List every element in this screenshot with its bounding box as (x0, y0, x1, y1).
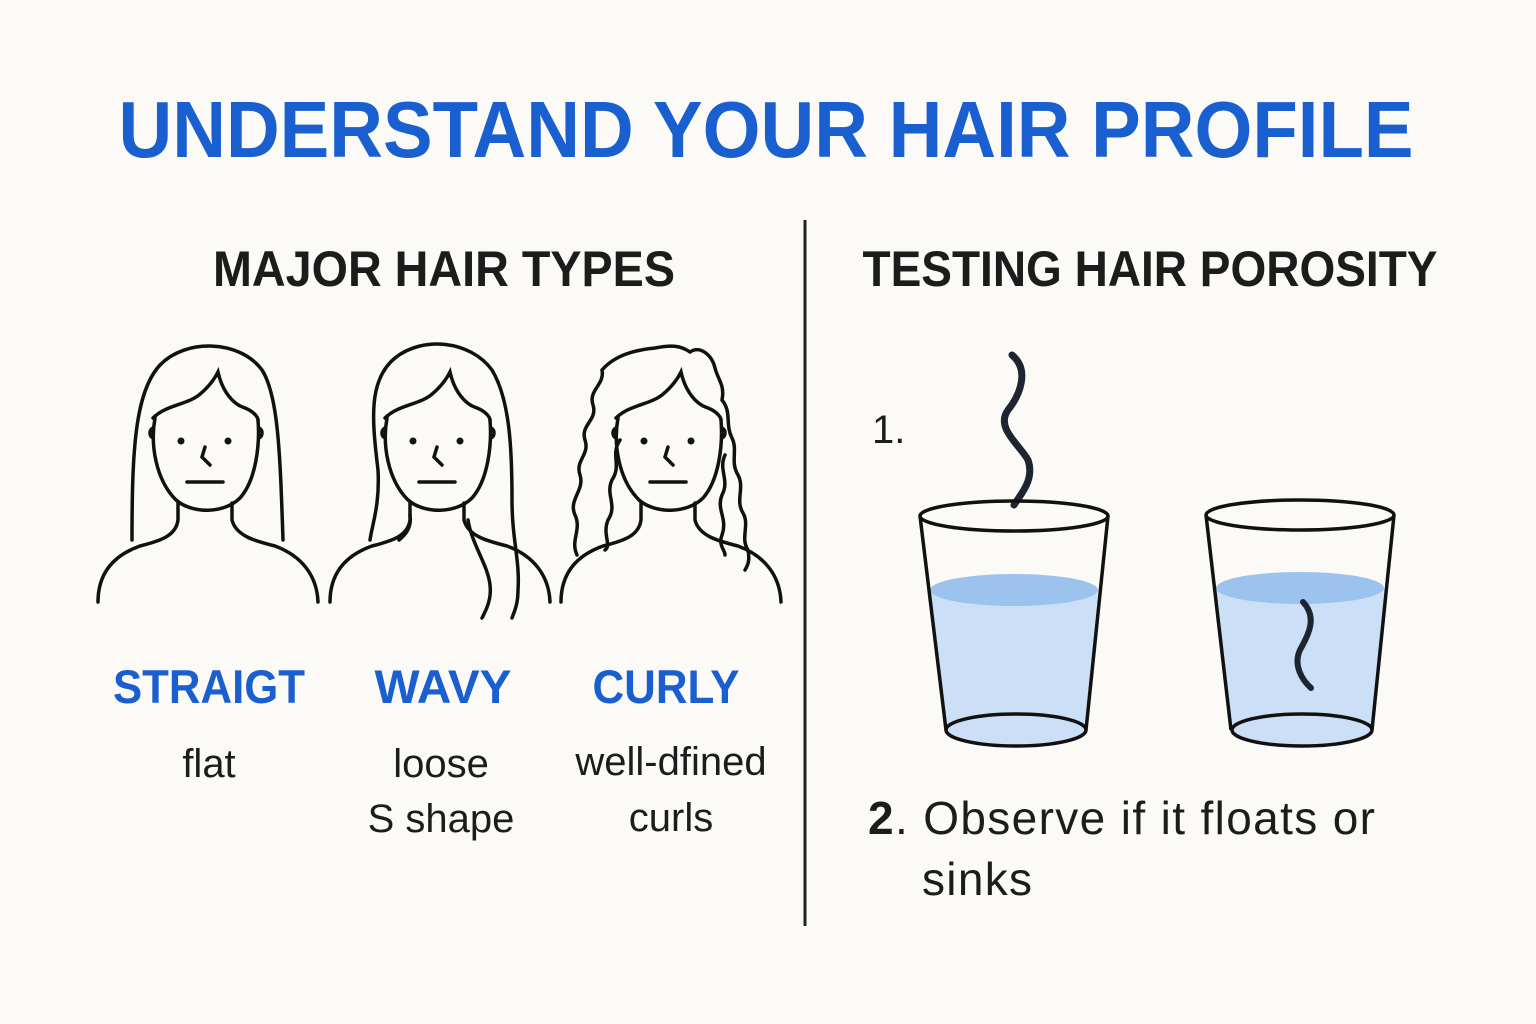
text: well-defined curls: curls (629, 796, 713, 840)
heading: testing hair porosity: TESTING HAIR POROSITY (862, 241, 1438, 297)
text: flat: flat (182, 742, 236, 786)
text: step 2 (868, 792, 1375, 905)
step 1 number: 1. (872, 408, 905, 452)
text: step 2: sinks (922, 853, 1032, 905)
icon: glass floating (920, 501, 1108, 746)
icon: curly hair face (561, 346, 781, 602)
text: loose S shape: S shape (368, 797, 514, 841)
icon: glass sinking (1206, 500, 1394, 746)
text: well-defined curls (574, 740, 767, 840)
text: loose S shape: loose (393, 742, 489, 786)
text: loose S shape (368, 742, 514, 841)
icon: wavy hair face (330, 344, 550, 618)
icon: hair strand above glass (1004, 355, 1030, 505)
icon: straight hair face (98, 346, 318, 602)
text: step 2: 2. Observe if it floats or (868, 792, 1375, 844)
label: wavy: WAVY (374, 660, 512, 713)
title: UNDERSTAND YOUR HAIR PROFILE (118, 85, 1414, 174)
text: well-defined curls: well-dfined (574, 740, 767, 784)
heading: major hair types: MAJOR HAIR TYPES (213, 241, 675, 297)
label: straight: STRAIGT (113, 660, 305, 713)
label: curly: CURLY (592, 660, 740, 713)
